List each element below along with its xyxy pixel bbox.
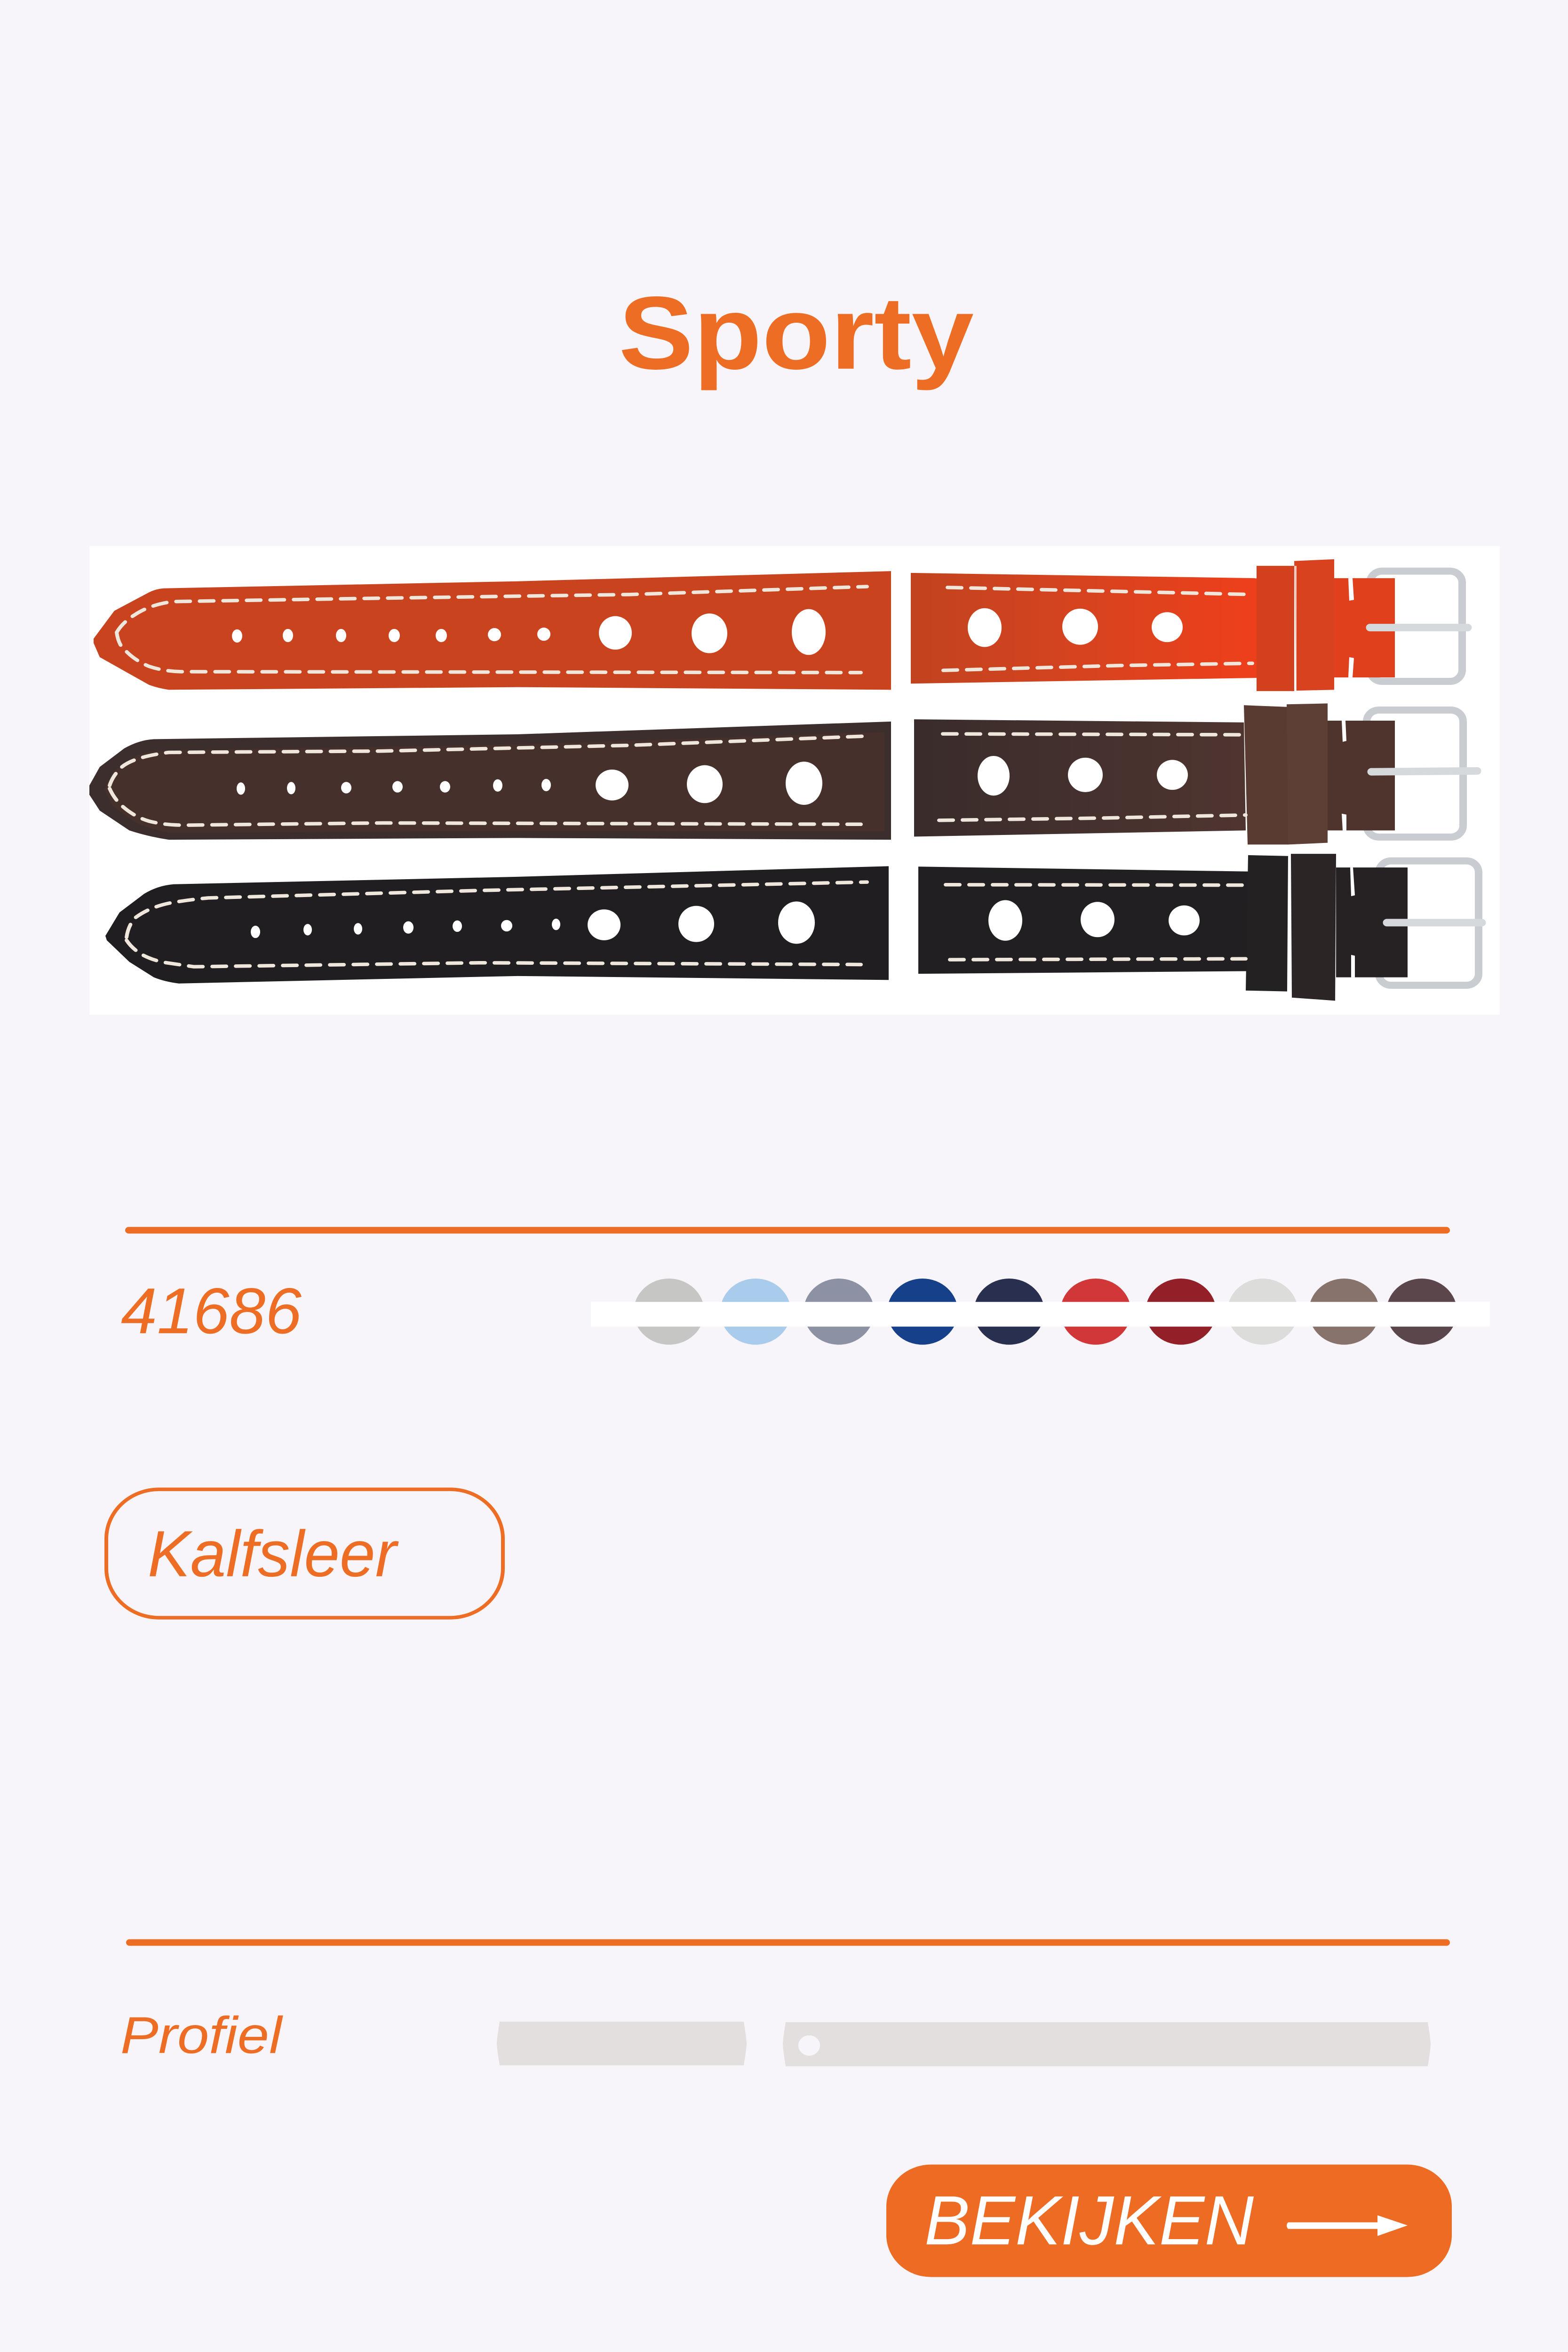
- label: Profiel: Profiel: [120, 2006, 283, 2065]
- icon: arrow: [1287, 2215, 1408, 2236]
- article number: 41686: [121, 1275, 302, 1347]
- title: Sporty: [619, 276, 974, 391]
- divider line: top: [125, 1227, 1450, 1233]
- panel: product photo of three watch straps: [89, 546, 1500, 1015]
- colour swatches: [591, 1279, 1490, 1345]
- strap: black buckle piece: [918, 854, 1482, 1001]
- material tag: Kalfsleer: [106, 1489, 503, 1618]
- strap: black long piece: [105, 866, 889, 984]
- strap: red buckle piece: [911, 559, 1468, 691]
- button: BEKIJKEN: BEKIJKEN: [924, 2182, 1254, 2259]
- divider line: bottom: [126, 1939, 1450, 1946]
- material tag: Kalfsleer: Kalfsleer: [148, 1518, 399, 1590]
- strap: red long piece: [94, 571, 891, 690]
- profile shape: short segment: [497, 2022, 747, 2066]
- strap: brown buckle piece: [914, 703, 1477, 844]
- strap: brown long piece: [89, 722, 891, 840]
- button: BEKIJKEN: [886, 2165, 1452, 2277]
- white band across swatches: [591, 1302, 1490, 1327]
- profile shape: long segment with hole: [783, 2022, 1431, 2066]
